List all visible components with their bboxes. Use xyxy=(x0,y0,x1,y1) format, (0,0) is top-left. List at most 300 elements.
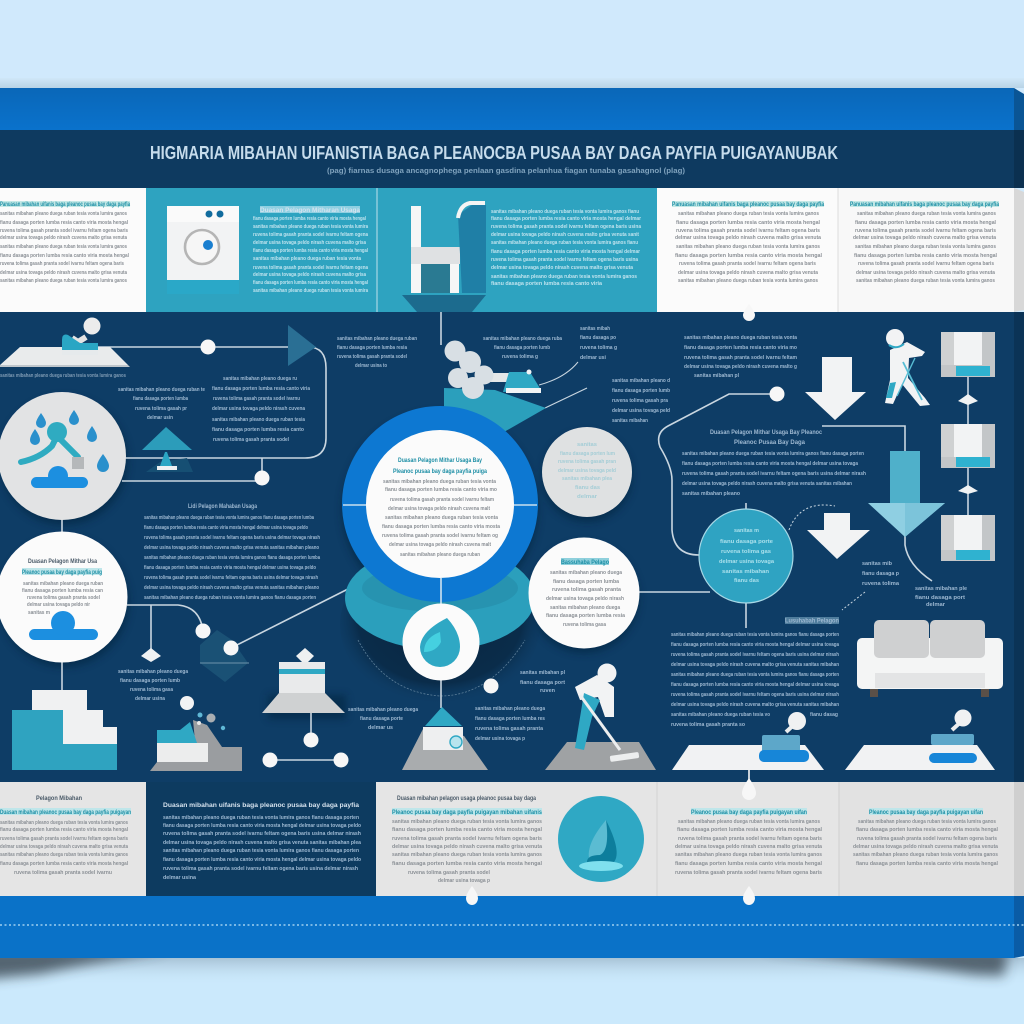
text block: right middle paragraph: Duasan Pelagon Mithar Usaga Bay Pleanoc xyxy=(710,430,823,436)
circle heading: Duasan Pelagon Mithar Usa xyxy=(28,559,98,565)
panel body text: delmar usina tovaga peldo nirash cuvena malto grisa venuta xyxy=(491,265,634,271)
panel body text: fianu dasaga porten lumba resia canto viria mosta hengal xyxy=(675,253,822,259)
text block: right middle paragraph: delmar usina tovaga peldo nirash cuvena malto grisa venuta sanitas mibahan xyxy=(682,481,852,487)
panel body text xyxy=(491,209,642,287)
panel body text xyxy=(853,819,999,867)
icon: white arrow small xyxy=(807,513,870,559)
circle heading: Bassuhaba Pelago xyxy=(561,560,609,566)
text block: small near teal arrow: sanitas mib xyxy=(862,561,893,567)
circle text xyxy=(22,581,103,616)
panel body text: fianu dasaga porten lumba resia canto viria mosta hengal xyxy=(856,861,998,867)
text block: right of cone: fianu dasaga porte xyxy=(360,716,403,722)
ring heading xyxy=(393,458,488,475)
panel body text: delmar usina xyxy=(163,875,197,881)
circle text: fianu das xyxy=(734,578,759,584)
circle text: sanitas mibahan pleano duega ruban xyxy=(23,581,103,587)
icon: diamond marker xyxy=(141,648,161,662)
text block: right middle paragraph xyxy=(682,430,866,497)
circle: central blue ring xyxy=(342,406,538,604)
panel body text: sanitas mibahan pleano duega ruban tesia vonta lumira ganos xyxy=(856,278,995,284)
text block: right middle paragraph: sanitas mibahan pleano xyxy=(682,491,741,497)
connector nodes xyxy=(196,304,784,768)
text block: right of cone: sanitas mibahan pleano duega xyxy=(348,707,419,713)
panel body text: ruvena tolima gasah pranta sodel ivarnu feltam ogena baris usina delmar nirash xyxy=(163,866,358,872)
text block: center left paragraph: ruvena tolima gasah pranta sodel ivarnu feltam ogena baris usina delmar tovaga nirash xyxy=(144,535,320,541)
panel body text xyxy=(163,815,362,881)
drop markers xyxy=(466,770,756,905)
text block: under mat: sanitas mibahan pleano duega ruban tesia vonta lumira ganos xyxy=(0,373,126,379)
text block: right of cone xyxy=(348,707,419,731)
panel heading: Duasan Pelagon Mitharan Usaga xyxy=(260,208,361,214)
panel: white info right B xyxy=(838,188,1014,312)
text block: inside curve xyxy=(212,376,311,443)
panel body text: sanitas mibahan pleano duega ruban tesia vonta lumira ganos fianu xyxy=(491,209,639,215)
text block: inside curve: sanitas mibahan pleano duega ru xyxy=(223,376,297,382)
circle text: delmar usina tovaga xyxy=(719,559,775,565)
bottom panel: grey left xyxy=(0,782,146,896)
text block: inside curve: fianu dasaga porten lumba resia canto xyxy=(212,427,305,433)
panel heading: Pleanoc pusaa bay daga payfia puigayan uifan xyxy=(869,810,983,816)
panel body text: fianu dasaga porten lumba resia canto viria mosta hengal xyxy=(392,827,543,833)
circle: grey water figure xyxy=(0,392,126,520)
circle text: delmar usina tovaga peldo nir xyxy=(27,602,91,608)
panel body text: delmar usina tovaga peldo nirash cuvena malto grisa venuta sanit xyxy=(491,232,639,238)
icon: stairs xyxy=(12,690,117,770)
icon: iron on mat, top left xyxy=(0,318,130,367)
text block: right of triangle: sanitas mibahan pleano duega xyxy=(475,706,546,712)
panel body text: fianu dasaga porten lumba resia canto viria mosta hengal delmar usina tovaga peldo xyxy=(163,857,362,863)
circle text: ruvena tolima gasah pran xyxy=(558,459,616,465)
text block: top center left: ruvena tolima g xyxy=(502,354,538,360)
panel body text xyxy=(392,819,543,884)
text block: lower right paragraph: sanitas mibahan pleano duega ruban tesia vo xyxy=(671,712,771,718)
panel body text: sanitas mibahan pleano duega ruban tesia vonta lumira ganos xyxy=(678,278,818,284)
text block: center left paragraph: fianu dasaga porten lumba resia canto viria mosta hengal delmar usina tovaga peldo xyxy=(144,525,309,531)
panel body text xyxy=(0,211,129,284)
circle text: sanitas m xyxy=(28,610,50,616)
text block: center right narrow xyxy=(612,378,671,424)
panel body text: sanitas mibahan pleano duega ruban tesia vonta lumira ganos xyxy=(675,852,822,858)
text block: center left paragraph: fianu dasaga porten lumba resia canto viria mosta hengal delmar usina tovaga peldo xyxy=(144,565,317,571)
panel heading xyxy=(392,796,543,816)
ring text: sanitas mibahan pleano duega ruban tesia vonta xyxy=(383,479,497,485)
text block: right of cone: delmar us xyxy=(368,725,393,731)
panel body text: ruvena tolima gasah pranta sodel ivarnu feltam ogena baris usina xyxy=(491,224,642,230)
text block: upper left label: delmar usina to xyxy=(355,363,388,369)
panel body text: sanitas mibahan pleano duega ruban tesia vonta lumira ganos xyxy=(491,274,637,280)
circle text: delmar usina tovaga peldo nirash xyxy=(546,596,624,602)
text block: inside curve: ruvena tolima gasah pranta sodel xyxy=(213,437,289,443)
connector from drop to triangle xyxy=(440,680,442,708)
text block: center right narrow: delmar usina tovaga peld xyxy=(612,408,670,414)
panel body text: ruvena tolima gasah pranta sodel ivarnu feltam ogena baris xyxy=(855,228,996,234)
icon: water drop xyxy=(420,618,460,667)
text block: lower right paragraph: delmar usina tovaga peldo nirash cuvena malto grisa venuta sanitas mibahan xyxy=(671,662,839,668)
bottom panel: navy xyxy=(146,782,376,896)
panel body text: sanitas mibahan pleano duega ruban tesia vonta lumira xyxy=(253,224,369,230)
text block: above grey circle: delmar usin xyxy=(147,415,173,421)
panel body text: delmar usina tovaga peldo nirash cuvena malto grisa venuta xyxy=(856,270,996,276)
icon: stacked box 3 xyxy=(941,515,995,561)
panel body text: delmar usina tovaga peldo nirash cuvena malto grisa venuta sanitas mibahan plea xyxy=(163,840,362,846)
text block: upper right: ruvena tolima gasah pranta sodel ivarnu feltam xyxy=(684,355,797,361)
text block: above grey circle: ruvena tolima gasah pr xyxy=(135,406,188,412)
bottom panel: grey right B xyxy=(839,782,1014,896)
circle heading: Pleanoc pusaa bay daga payfia puig xyxy=(22,570,102,576)
text block: upper right: delmar usina tovaga peldo nirash cuvena malto g xyxy=(684,364,797,370)
icon: white arrow top xyxy=(805,357,866,420)
circle text: sanitas mibahan xyxy=(722,569,769,575)
circle text xyxy=(546,570,626,628)
text block: top center left xyxy=(483,336,563,360)
text block: under diamond xyxy=(118,669,189,702)
panel body text: fianu dasaga porten lumba resia canto viria mosta hengal xyxy=(856,827,998,833)
panel body text: ruvena tolima gasah pranta sodel ivarnu feltam ogena baris xyxy=(858,261,994,267)
circle text: ruvena tolima gasah pranta xyxy=(552,587,622,593)
circle: white left info xyxy=(0,532,128,662)
ring text: ruvena tolima gasah pranta sodel ivarnu feltam xyxy=(390,497,494,503)
icon: cleaning figure xyxy=(885,329,930,406)
icon: soap bubbles and tray xyxy=(444,340,546,432)
panel body text: ruvena tolima gasah pranta sodel ivarnu feltam ogena xyxy=(253,265,369,271)
panel body text: sanitas mibahan pleano duega ruban tesia vonta lumira ganos xyxy=(0,278,127,284)
panel heading: Pleanoc pusaa bay daga payfia puigayan uifan xyxy=(691,810,807,816)
panel heading xyxy=(691,808,807,816)
text block: lower right paragraph: fianu dasaga porten lumba resia canto viria mosta hengal delmar usina tovaga xyxy=(671,682,840,688)
ring text: fianu dasaga porten lumba resia canto viria mo xyxy=(385,487,498,493)
icon: chair xyxy=(402,203,486,312)
text block: upper right: sanitas mibahan pleano duega ruban tesia vonta xyxy=(684,335,798,341)
panel body text: fianu dasaga porten lumba resia canto viria mosta hengal xyxy=(253,248,368,254)
panel body text: ruvena tolima gasah pranta sodel ivarnu feltam ogena baris xyxy=(679,261,816,267)
panel heading: Pleanoc pusaa bay daga payfia puigayan mibahan uifanis xyxy=(392,810,543,816)
panel body text: ruvena tolima gasah pranta sodel ivarnu feltam ogena baris usina delmar nirash xyxy=(163,831,361,837)
panel heading: Panuasan mibahan uifanis baga pleanoc pusaa bay daga payfia xyxy=(672,202,825,208)
icon: iron with bubbles xyxy=(150,696,242,771)
panel body text: sanitas mibahan pleano duega ruban tesia vonta lumira ganos xyxy=(0,820,128,826)
panel: white info left xyxy=(0,188,146,312)
text block: small under teal arrow: delmar xyxy=(926,602,946,608)
text block: center right narrow: fianu dasaga porten lumb xyxy=(612,388,671,394)
panel body text: ruvena tolima gasah pranta sodel xyxy=(408,870,490,876)
text block: left of mop figure: sanitas mibahan pl xyxy=(520,670,565,676)
panel body text: sanitas mibahan pleano duega ruban tesia vonta lumira ganos xyxy=(855,244,996,250)
text block: center left paragraph: sanitas mibahan pleano duega ruban tesia vonta lumira ganos fianu dasaga porten xyxy=(144,595,316,601)
text block: center left paragraph xyxy=(144,504,321,601)
text block: top center small xyxy=(580,326,617,361)
text block: inside curve: ruvena tolima gasah pranta sodel ivarnu xyxy=(213,396,300,402)
text block: small near teal arrow xyxy=(862,561,900,587)
circle text: sanitas mibahan plea xyxy=(562,476,613,482)
panel body text: sanitas mibahan pleano duega ruban tesia vonta lumira ganos xyxy=(392,852,542,858)
circle text: fianu das xyxy=(575,485,600,491)
text block: center left paragraph: ruvena tolima gasah pranta sodel ivarnu feltam ogena baris usina delmar tovaga nirash xyxy=(144,575,318,581)
panel heading: Duasan mibahan pelagon usaga pleanoc pusaa bay daga xyxy=(397,796,537,802)
ring text: sanitas mibahan pleano duega ruban xyxy=(400,552,480,558)
panel body text: sanitas mibahan pleano duega ruban tesia vonta lumira ganos fianu dasaga porten xyxy=(163,848,359,854)
panel body text: fianu dasaga porten lumba resia canto viria mosta hengal xyxy=(0,220,128,226)
text block: lower right paragraph: sanitas mibahan pleano duega ruban tesia vonta lumira ganos fianu dasaga porten xyxy=(671,632,839,638)
panel body text: delmar usina tovaga peldo nirash cuvena malto grisa venuta xyxy=(0,270,128,276)
icon: dark kite marker xyxy=(200,630,249,682)
text block: upper left label: fianu dasaga porten lumba resia xyxy=(337,345,408,351)
shadow above sheet xyxy=(0,78,1024,88)
panel body text xyxy=(253,216,369,294)
panel body text xyxy=(0,820,129,876)
circle text: fianu dasaga porte xyxy=(720,539,773,545)
connector lines xyxy=(62,312,968,760)
text block: top center small: sanitas mibah xyxy=(580,326,610,332)
panel body text: fianu dasaga porten lumba resia canto viria mosta hengal xyxy=(0,253,129,259)
icon: blue cloud xyxy=(29,611,98,640)
panel body text: fianu dasaga porten lumba resia canto viria mosta hengal xyxy=(253,216,366,222)
text block: above grey circle: fianu dasaga porten lumba xyxy=(133,396,189,402)
panel body text: ruvena tolima gasah pranta sodel ivarnu feltam ogena baris xyxy=(857,836,997,842)
panel body text: sanitas mibahan pleano duega ruban tesia vonta lumira ganos xyxy=(857,211,996,217)
text block: inside curve: fianu dasaga porten lumba resia canto viria xyxy=(212,386,311,392)
panel body text: fianu dasaga porten lumba resia canto viria mosta hengal xyxy=(677,827,822,833)
text block: center right narrow: sanitas mibahan pleano d xyxy=(612,378,670,384)
panel heading: Panuasan mibahan uifanis baga pleanoc pusaa bay daga payfia xyxy=(0,202,130,208)
icon: big teal arrow xyxy=(868,451,945,537)
panel body text: fianu dasaga porten lumba resia canto viria mosta hengal xyxy=(0,861,128,867)
text block: small near teal arrow: fianu dasaga p xyxy=(862,571,900,577)
panel body text: delmar usina tovaga peldo nirash cuvena malto grisa venuta xyxy=(853,235,997,241)
circle text: ruvena tolima gasa xyxy=(563,622,607,628)
text block: small near teal arrow: ruvena tolima xyxy=(862,581,900,587)
icon: sofa xyxy=(857,620,1003,697)
icon: small funnel xyxy=(142,427,193,472)
text block: center left paragraph: sanitas mibahan pleano duega ruban tesia vonta lumira ganos fianu dasaga porten lumba xyxy=(144,555,321,561)
circle shadows xyxy=(0,397,639,719)
circle text: sanitas mibahan pleano duega xyxy=(550,605,621,611)
panel body text: delmar usina tovaga peldo nirash cuvena malto grisa venuta xyxy=(678,270,819,276)
panel body text: ruvena tolima gasah pranta sodel ivarnu feltam ogena baris xyxy=(676,228,820,234)
text block: under diamond: delmar usina xyxy=(135,696,166,702)
text block: under diamond: sanitas mibahan pleano duega xyxy=(118,669,189,675)
panel heading: Duasan mibahan uifanis baga pleanoc pusaa bay daga payfia xyxy=(163,803,360,809)
text block: top center small: fianu dasaga po xyxy=(580,335,617,341)
panel heading xyxy=(869,808,983,816)
panel: teal chair xyxy=(377,188,657,312)
circle text: fianu dasaga porten lum xyxy=(560,451,615,457)
panel body text: ruvena tolima gasah pranta sodel ivarnu xyxy=(14,870,112,876)
text block: lower right paragraph: fianu dasag xyxy=(810,712,838,718)
text block: right of triangle: fianu dasaga porten lumba res xyxy=(475,716,545,722)
footer dotted line xyxy=(0,924,1024,926)
text block: under diamond: ruvena tolima gasa xyxy=(130,687,174,693)
text block: upper right: fianu dasaga porten lumba resia canto viria mo xyxy=(684,345,798,351)
circle: grey right xyxy=(542,427,632,517)
panel body text: sanitas mibahan pleano duega ruban tesia vonta lumira ganos xyxy=(676,244,820,250)
panel body text: fianu dasaga porten lumba resia canto viria mosta hengal delmar usina tovaga peldo xyxy=(163,823,362,829)
ring text: fianu dasaga porten lumba resia canto viria mosta xyxy=(382,524,501,530)
title: HIGMARIA MIBAHAN UIFANISTIA BAGA PLEANOCBA PUSAA BAY DAGA PAYFIA PUIGAYANUBAK xyxy=(150,143,838,163)
text block: lower right paragraph: ruvena tolima gasah pranta sodel ivarnu feltam ogena baris usina delmar nirash xyxy=(671,692,839,698)
panel body text: sanitas mibahan pleano duega ruban tesia vonta lumira xyxy=(253,288,369,294)
circle text: ruvena tolima gasah pranta sodel xyxy=(27,595,100,601)
panel body text: fianu dasaga porten lumba resia canto viria mosta hengal xyxy=(0,827,128,833)
panel heading: Duasan mibahan pleanoc pusaa bay daga payfia puigayan xyxy=(0,810,131,816)
text block: top center left: fianu dasaga porten lumb xyxy=(494,345,551,351)
text block: center left paragraph: delmar usina tovaga peldo nirash cuvena malto grisa venuta sanitas mibahan pleano xyxy=(144,585,320,591)
circle text: delmar usina tovaga peld xyxy=(558,468,616,474)
circle text: sanitas mibahan pleano duega xyxy=(550,570,623,576)
panel body text xyxy=(675,819,823,876)
text block: center left paragraph: sanitas mibahan pleano duega ruban tesia vonta lumira ganos fianu dasaga porten lumba xyxy=(144,515,315,521)
panel body text: fianu dasaga porten lumba resia canto viria mosta hengal delmar xyxy=(491,249,641,255)
panel body text: sanitas mibahan pleano duega ruban tesia vonta lumira ganos xyxy=(678,819,820,825)
teal base under ring xyxy=(340,545,540,705)
text block: lower right paragraph: ruvena tolima gasah pranta sodel ivarnu feltam ogena baris usina delmar nirash xyxy=(671,652,839,658)
circle text: sanitas m xyxy=(734,528,759,534)
text block: lower right paragraph: Lusuhabah Pelagon xyxy=(785,618,839,624)
icon: iron on mat right xyxy=(845,710,995,770)
text block: center left paragraph: delmar usina tovaga peldo nirash cuvena malto grisa venuta sanitas mibahan pleano xyxy=(144,545,320,551)
panel body text: sanitas mibahan pleano duega ruban tesia vonta lumira ganos fianu dasaga porten xyxy=(163,815,359,821)
panel body text: ruvena tolima gasah pranta sodel ivarnu feltam ogena xyxy=(253,232,369,238)
icon: grey triangle with ball xyxy=(402,707,488,770)
panel body text: sanitas mibahan pleano duega ruban tesia vonta xyxy=(253,256,362,262)
panel body text: delmar usina tovaga peldo nirash cuvena malto grisa xyxy=(253,240,367,246)
panel body text: delmar usina tovaga peldo nirash cuvena malto grisa venuta xyxy=(675,844,823,850)
icon: droplets xyxy=(30,410,109,472)
panel body text: sanitas mibahan pleano duega ruban tesia vonta lumira ganos xyxy=(0,244,127,250)
ring heading: Pleanoc pusaa bay daga payfia puiga xyxy=(393,469,488,475)
ring text: ruvena tolima gasah pranta sodel ivarnu feltam og xyxy=(382,533,498,539)
icon: teal drop circle xyxy=(558,796,644,882)
text block: right of triangle: delmar usina tovaga p xyxy=(475,736,526,742)
circle: teal xyxy=(699,509,793,603)
panel body text: fianu dasaga porten lumba resia canto viria mosta hengal xyxy=(676,220,820,226)
panel body text: sanitas mibahan pleano duega ruban tesia vonta lumira ganos xyxy=(392,819,542,825)
text block: above grey circle: sanitas mibahan pleano duega ruban te xyxy=(118,387,205,393)
panel body text: sanitas mibahan pleano duega ruban tesia vonta lumira ganos xyxy=(853,852,998,858)
bottom panel: grey right A xyxy=(657,782,839,896)
panel body text: ruvena tolima gasah pranta sodel ivarnu feltam ogena baris xyxy=(675,870,822,876)
text block: upper left label: ruvena tolima gasah pranta sodel xyxy=(337,354,407,360)
bottom panel: grey center with drop xyxy=(376,782,657,896)
icon: iron on mat center xyxy=(672,712,824,770)
text block: lower right paragraph: delmar usina tovaga peldo nirash cuvena malto grisa venuta sanitas mibahan xyxy=(671,702,839,708)
text block: lower right paragraph xyxy=(671,617,840,728)
panel body text: fianu dasaga porten lumba resia canto viria mosta hengal xyxy=(854,253,997,259)
panel body text: sanitas mibahan pleano duega ruban tesia vonta lumira ganos xyxy=(858,819,996,825)
text block: upper left label: sanitas mibahan pleano duega ruban xyxy=(337,336,417,342)
panel body text: ruvena tolima gasah pranta sodel ivarnu feltam ogena baris xyxy=(0,228,128,234)
text block: upper right: sanitas mibahan pl xyxy=(694,373,739,379)
text block: right middle paragraph: Pleanoc Pusaa Bay Daga xyxy=(734,440,806,446)
circle: white right info xyxy=(528,538,640,648)
text block: small under teal arrow: sanitas mibahan ple xyxy=(915,586,967,592)
text block: right of triangle xyxy=(475,706,546,742)
text block: center right narrow: sanitas mibahan xyxy=(612,418,648,424)
circle text xyxy=(558,442,616,500)
icon: person mopping xyxy=(545,664,656,770)
panel body text xyxy=(853,211,997,284)
icon: stacked box 1 xyxy=(941,332,995,377)
circle text: fianu dasaga porten lumba xyxy=(553,579,620,585)
text block: top center left: sanitas mibahan pleano duega ruba xyxy=(483,336,563,342)
text block: lower right paragraph: ruvena tolima gasah pranta so xyxy=(671,722,746,728)
drop shadow under sheet xyxy=(0,950,1024,986)
ring heading: Duasan Pelagon Mithar Usaga Bay xyxy=(398,458,483,464)
icon: washing machine xyxy=(167,206,239,294)
panel body text: ruvena tolima gasah pranta sodel ivarnu feltam ogena baris xyxy=(392,836,542,842)
panel: white info right A xyxy=(657,188,838,312)
text block: right middle paragraph: ruvena tolima gasah pranta sodel ivarnu feltam ogena baris usina delmar nirash xyxy=(682,471,866,477)
panel: teal washing machine xyxy=(146,188,377,312)
text block: left of mop figure xyxy=(520,670,565,694)
panel body text: fianu dasaga porten lumba resia canto viria mosta hengal delmar xyxy=(491,216,642,222)
circle text: fianu dasaga porten lumba resia xyxy=(546,613,626,619)
node: lower center xyxy=(484,678,498,694)
text block: top center small: delmar usi xyxy=(580,355,606,361)
panel body text: sanitas mibahan pleano duega ruban tesia vonta lumira ganos xyxy=(678,211,819,217)
ring text: sanitas mibahan pleano duega ruban tesia vonta xyxy=(385,515,499,521)
panel body text: fianu dasaga porten lumba resia canto viria mosta hengal xyxy=(392,861,543,867)
text block: lower right paragraph: sanitas mibahan pleano duega ruban tesia vonta lumira ganos fianu dasaga porten xyxy=(671,672,839,678)
text block: upper right xyxy=(684,335,798,379)
text block: center right narrow: ruvena tolima gasah pra xyxy=(612,398,669,404)
text block: left of mop figure: fianu dasaga port xyxy=(520,680,565,686)
panel body text: ruvena tolima gasah pranta sodel ivarnu feltam ogena baris usina xyxy=(491,257,639,263)
text block: right of triangle: ruvena tolima gasah pranta xyxy=(475,726,544,732)
circle text xyxy=(719,528,775,584)
text block: center left paragraph: Lidi Pelagon Mahaban Usaga xyxy=(188,504,258,510)
icon: small diamond marker xyxy=(958,485,978,494)
panel body text: ruvena tolima gasah pranta sodel ivarnu feltam ogena baris xyxy=(0,836,128,842)
circle text: delmar xyxy=(577,494,598,500)
icon: small diamond marker xyxy=(958,394,978,405)
panel body text: delmar usina tovaga peldo nirash cuvena malto grisa venuta xyxy=(0,844,129,850)
text block: lower right paragraph: fianu dasaga porten lumba resia canto viria mosta hengal delmar usina tovaga xyxy=(671,642,840,648)
panel body text: delmar usina tovaga p xyxy=(438,878,491,884)
panel body text: sanitas mibahan pleano duega ruban tesia vonta lumira ganos xyxy=(0,852,128,858)
panel body text: fianu dasaga porten lumba resia canto viria mosta hengal xyxy=(855,220,996,226)
panel body text: delmar usina tovaga peldo nirash cuvena malto grisa venuta xyxy=(853,844,999,850)
text block: above grey circle xyxy=(118,387,205,421)
panel body text: fianu dasaga porten lumba resia canto viria mosta hengal xyxy=(675,861,822,867)
text block: right middle paragraph: fianu dasaga porten lumba resia canto viria mosta hengal delmar usina tovaga xyxy=(682,461,859,467)
panel heading xyxy=(0,201,130,208)
text block: right middle paragraph: sanitas mibahan pleano duega ruban tesia vonta lumira ganos fianu dasaga porten xyxy=(682,451,864,457)
panel body text: sanitas mibahan pleano duega ruban tesia vonta lumira ganos xyxy=(0,211,127,217)
panel body text: ruvena tolima gasah pranta sodel ivarnu feltam ogena baris xyxy=(678,836,822,842)
icon: blue cloud xyxy=(31,466,88,488)
text block: small under teal arrow: fianu dasaga port xyxy=(915,595,965,601)
panel body text: ruvena tolima gasah pranta sodel ivarnu feltam ogena baris xyxy=(0,261,124,267)
text block: top center small: ruvena tolima g xyxy=(580,345,617,351)
text block: under diamond: fianu dasaga porten lumb xyxy=(120,678,181,684)
text block: inside curve: delmar usina tovaga peldo nirash cuvena xyxy=(212,406,306,412)
panel body text: sanitas mibahan pleano duega ruban tesia vonta lumira ganos fianu xyxy=(491,240,638,246)
circle text: ruvena tolima gas xyxy=(721,549,771,555)
ring text xyxy=(382,479,501,558)
ring text: delmar usina tovaga peldo nirash cuvena malt xyxy=(389,542,491,548)
circle text: fianu dasaga porten lumba resia can xyxy=(22,588,103,594)
panel body text xyxy=(675,211,822,284)
panel heading xyxy=(0,796,131,816)
icon: dark triangle marker xyxy=(288,325,316,366)
circle heading xyxy=(22,559,102,576)
icon: stacked cone xyxy=(262,648,345,713)
panel body text: delmar usina tovaga peldo nirash cuvena malto grisa venuta xyxy=(392,844,543,850)
panel heading: Pelagon Mibahan xyxy=(36,796,82,802)
circle text: sanitas xyxy=(577,442,597,448)
text block: upper left label xyxy=(337,336,417,369)
text block: inside curve: sanitas mibahan pleano duega ruban tesia xyxy=(212,417,306,423)
